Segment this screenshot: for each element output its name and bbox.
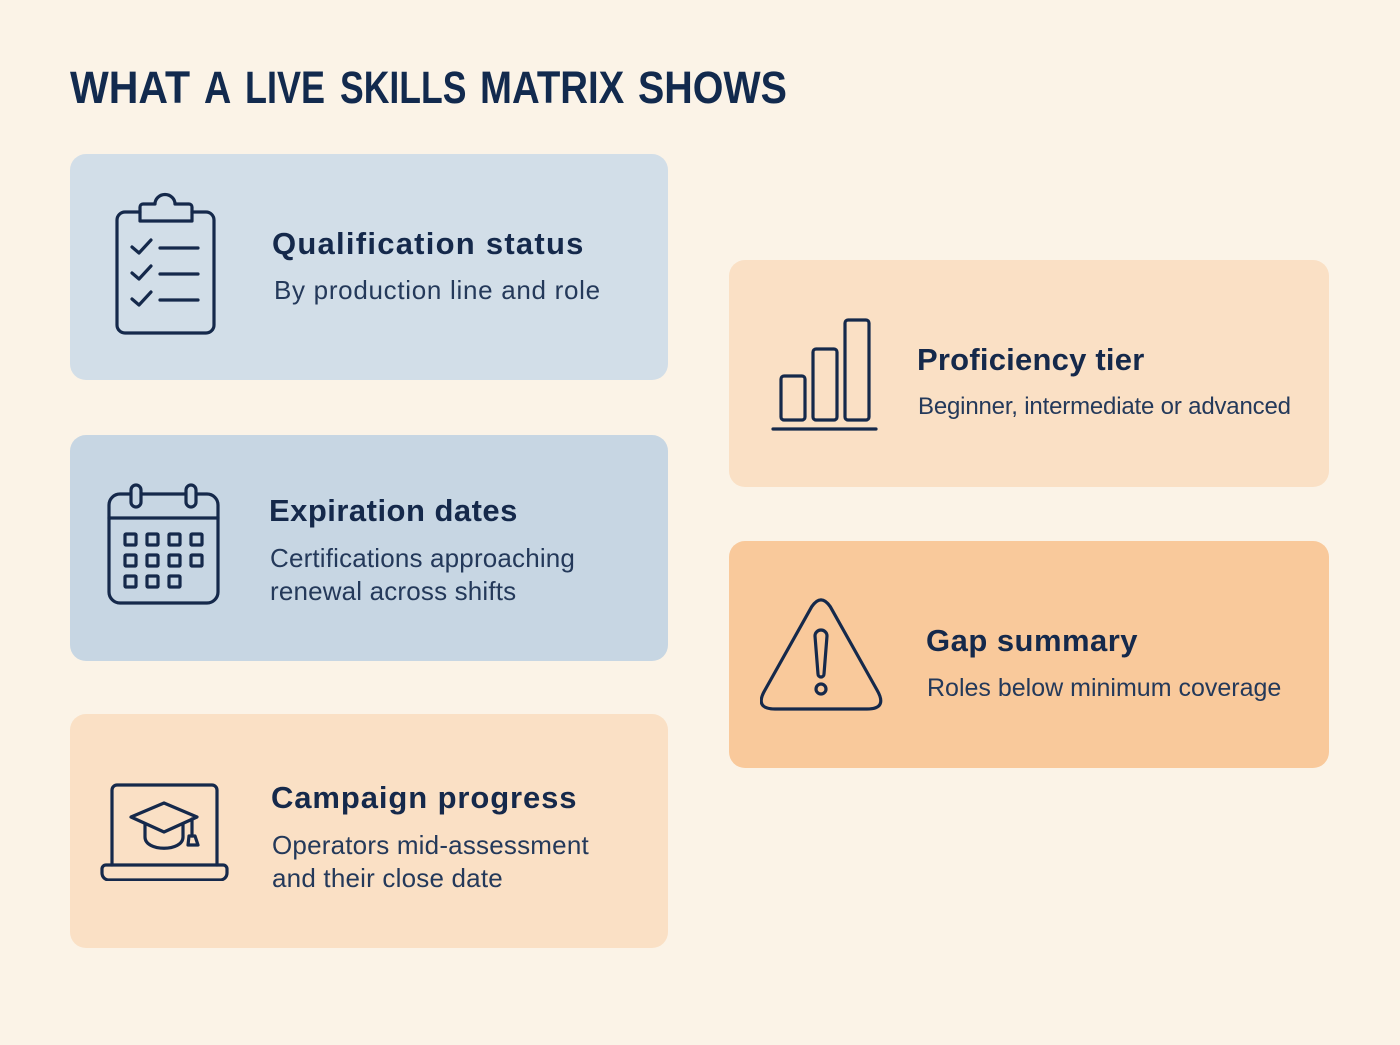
title: MATRIX [480, 62, 624, 113]
heading: Proficiency tier [917, 342, 1144, 377]
title: SHOWS [638, 62, 787, 113]
panel: gap summary [729, 541, 1329, 768]
icon: laptop with graduation cap [100, 783, 229, 881]
title [70, 62, 787, 113]
description: Beginner, intermediate or advanced [918, 393, 1291, 420]
icon: calendar [107, 483, 220, 605]
panel: proficiency tier [729, 260, 1329, 487]
description: Operators mid-assessment [272, 830, 589, 860]
icon: clipboard checklist [115, 192, 216, 335]
description: and their close date [272, 863, 503, 893]
heading: Expiration dates [269, 493, 518, 528]
panel: expiration dates [70, 435, 668, 661]
description: By production line and role [274, 275, 601, 305]
description: Roles below minimum coverage [927, 674, 1281, 702]
title: LIVE [245, 62, 325, 113]
description [270, 543, 575, 606]
title: WHAT [70, 62, 190, 113]
panel: qualification status [70, 154, 668, 380]
panel: campaign progress [70, 714, 668, 948]
heading: Campaign progress [271, 780, 577, 815]
title: A [204, 62, 231, 113]
description: renewal across shifts [270, 576, 516, 606]
description [272, 830, 589, 893]
title: SKILLS [340, 62, 466, 113]
description: Certifications approaching [270, 543, 575, 573]
icon: warning triangle [760, 598, 882, 711]
heading: Gap summary [926, 623, 1138, 658]
icon: bar chart [771, 318, 878, 431]
heading: Qualification status [272, 226, 585, 261]
